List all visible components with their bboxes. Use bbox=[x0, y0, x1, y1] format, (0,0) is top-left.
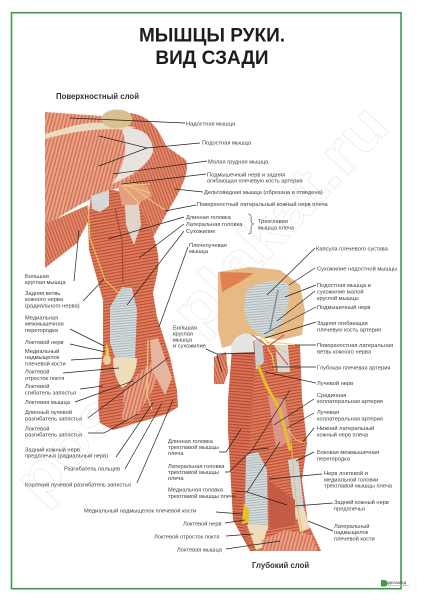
labels: superficial left: отросток локтя bbox=[25, 376, 64, 382]
supraspinatus bbox=[45, 112, 108, 136]
labels: superficial left: предплечья (радиальный нерв) bbox=[25, 452, 108, 460]
teres major bbox=[45, 205, 89, 268]
labels: superficial left bbox=[25, 274, 131, 488]
labels: deep right: предплечья bbox=[334, 506, 365, 512]
labels: superficial right: Плечелучевая bbox=[189, 243, 227, 249]
labels: deep left: круглая bbox=[173, 332, 193, 338]
triceps tendon bbox=[245, 452, 268, 534]
anconeus bbox=[122, 360, 159, 420]
infraspinatus bbox=[45, 129, 153, 226]
triceps brace bbox=[248, 214, 254, 234]
head separation bbox=[115, 208, 123, 283]
labels: deep left: мышца bbox=[173, 338, 193, 344]
labels: deep right: сухожилие малой bbox=[317, 288, 364, 296]
labels: superficial right: Подмышечный нерв и задняя bbox=[207, 172, 285, 178]
deep arm muscle body bbox=[243, 345, 321, 551]
labels: deep left: Локтевая мышца bbox=[177, 548, 223, 554]
labels: superficial right: Сухожилие bbox=[186, 229, 215, 235]
labels: superficial left: Задняя ветвь bbox=[25, 291, 60, 297]
lateral head tendon top bbox=[124, 192, 141, 245]
radial nerve branch bbox=[88, 205, 122, 296]
spine orange muscle bbox=[220, 272, 254, 292]
labels: superficial right: Поверхностный латеральный кожный нерв плеча bbox=[197, 201, 329, 208]
labels: superficial left: Разгибатель пальцев bbox=[64, 466, 120, 472]
anconeus bbox=[262, 530, 318, 551]
triceps and forearm bbox=[88, 190, 178, 430]
labels: deep left: и сухожилие bbox=[173, 344, 206, 350]
axillary vessels bbox=[118, 182, 152, 205]
tendon grey lateral bbox=[254, 338, 264, 370]
labels: superficial right: огибающая плечевую кость артерия bbox=[207, 178, 303, 184]
lateral epicondyle bbox=[296, 508, 310, 532]
illustration: deep arm bbox=[214, 267, 321, 551]
labels: superficial left: сгибатель запястья bbox=[25, 390, 76, 396]
acromion bbox=[102, 110, 132, 128]
radial nerve bbox=[258, 365, 290, 450]
leader lines bbox=[63, 118, 333, 549]
labels: superficial left: Большая bbox=[25, 274, 49, 280]
circumflex arteries bbox=[252, 335, 288, 370]
labels: deep right: круглой мышцы bbox=[317, 295, 359, 302]
labels: deep right: плечевую кость артерия bbox=[317, 328, 381, 334]
labels: superficial left: Короткий лучевой разгибатель запястья bbox=[25, 482, 131, 488]
labels: superficial right: мышца плеча bbox=[258, 226, 295, 232]
labels: deep right: Задняя огибающая bbox=[317, 321, 368, 327]
heading: superficial layer: Поверхностный слой bbox=[56, 92, 139, 101]
long head tendon top bbox=[91, 190, 109, 212]
labels: superficial right bbox=[186, 122, 329, 255]
watermark: poster-plakat.ru bbox=[1, 92, 401, 514]
labels: deep left: плеча bbox=[168, 451, 184, 457]
brachialis pale bbox=[268, 395, 292, 448]
labels: deep right: медиальной головки bbox=[324, 476, 378, 484]
labels: deep right: Подостная мышца и bbox=[317, 283, 371, 289]
labels: superficial right: мышца bbox=[189, 249, 209, 255]
labels: deep left: Длинная головка bbox=[168, 439, 214, 445]
axillary nerves bbox=[255, 330, 300, 370]
labels: superficial left: Локтевой bbox=[25, 426, 49, 432]
labels: deep right: Поверхностная латеральная bbox=[317, 343, 393, 349]
triceps tendon bbox=[110, 287, 137, 363]
labels: superficial left: межмышечная bbox=[25, 322, 64, 328]
ulnar nerve deep bbox=[242, 503, 249, 524]
labels: deep right: перегородка bbox=[317, 456, 351, 462]
title: ВИД СЗАДИ bbox=[155, 48, 269, 69]
labels: superficial left: разгибатель запястья bbox=[25, 432, 82, 438]
lateral septum bbox=[288, 458, 304, 520]
labels: deep right: надмыщелок bbox=[334, 530, 369, 536]
labels: superficial right: Малая грудная мышца bbox=[208, 160, 269, 166]
labels: deep left: Медиальная головка bbox=[168, 488, 224, 494]
labels: deep right: Сухожилие надостной мышцы bbox=[317, 266, 397, 272]
labels: deep left: Локтевой нерв bbox=[183, 520, 222, 528]
labels: deep left bbox=[84, 326, 237, 554]
triceps long head bbox=[228, 335, 262, 551]
scapular spine bbox=[45, 123, 135, 140]
labels: deep right: Лучевая bbox=[317, 410, 339, 416]
logo: ДЕЛАМЕД bbox=[388, 581, 406, 585]
olecranon bbox=[247, 525, 268, 550]
labels: superficial left: (радиального нерва) bbox=[25, 304, 80, 310]
labels: superficial right: Трехглавая bbox=[258, 219, 288, 225]
labels: superficial left: Локтевой нерв bbox=[25, 339, 64, 346]
labels: superficial left: плечевой кости bbox=[25, 360, 66, 368]
labels: superficial left: разгибатель запястья bbox=[25, 416, 82, 422]
labels: deep right: Капсула плечевого сустава bbox=[316, 246, 389, 252]
ulnar nerve bbox=[105, 342, 109, 362]
labels: superficial left: Локтевой bbox=[25, 383, 49, 390]
labels: deep right: ветвь кожного нерва bbox=[317, 350, 372, 356]
labels: superficial left: круглая мышца bbox=[25, 280, 66, 286]
labels: superficial right: Надостная мышца bbox=[186, 122, 236, 128]
labels: deep left: плеча bbox=[168, 476, 184, 482]
labels: deep right: коллатеральная артерия bbox=[317, 416, 383, 422]
labels: deep right: Нижний латеральный bbox=[317, 425, 374, 432]
scapula bbox=[218, 267, 305, 348]
labels: superficial right: Длинная головка bbox=[186, 215, 232, 221]
labels: deep right: Боковая межмышечная bbox=[317, 450, 379, 456]
labels: deep left: трехглавой мышцы bbox=[168, 444, 219, 451]
labels: deep right: Срединная bbox=[317, 393, 346, 399]
labels: deep right: кожный нерв плеча bbox=[317, 432, 369, 438]
labels: deep right: коллатеральная артерия bbox=[317, 399, 383, 405]
labels: deep right: Латеральный bbox=[334, 523, 370, 530]
labels: deep right: Нерв локтевой и bbox=[324, 470, 368, 477]
title bbox=[139, 26, 285, 69]
heading: deep layer: Глубокий слой bbox=[252, 561, 309, 570]
labels: deep left: Медиальный надмыщелок плечевой кости bbox=[84, 508, 196, 514]
forearm nerve bbox=[147, 340, 152, 410]
labels: deep left: Латеральная головка bbox=[168, 464, 225, 470]
deltoid flap bbox=[118, 113, 187, 256]
labels: superficial left: Локтевой bbox=[25, 368, 49, 376]
labels: superficial left: Длинный лучевой bbox=[25, 409, 72, 416]
labels: deep right: Задний кожный нерв bbox=[334, 499, 389, 506]
tendon long head top bbox=[231, 333, 254, 353]
labels: superficial left: Медиальный bbox=[25, 348, 59, 355]
labels: superficial left: надмыщелок bbox=[25, 355, 60, 361]
labels: deep left: Большая bbox=[173, 326, 197, 332]
labels: superficial right: Дельтовидная мышца (обрезана и отведена) bbox=[204, 190, 323, 196]
labels: superficial left: перегородка bbox=[25, 328, 59, 334]
labels: superficial right: Подостная мышца bbox=[202, 140, 252, 146]
title: МЫШЦЫ РУКИ. bbox=[139, 26, 285, 46]
olecranon bbox=[113, 358, 137, 388]
labels: superficial left: кожного нерва bbox=[25, 297, 64, 303]
labels: deep left: Локтевой отросток локтя bbox=[154, 534, 219, 540]
labels: deep left: трехглавой мышцы bbox=[168, 469, 219, 476]
medial muscle bbox=[268, 480, 295, 530]
labels: superficial left: Задний кожный нерв bbox=[25, 446, 80, 454]
forearm extensor tendons bbox=[150, 338, 172, 395]
illustration: superficial arm bbox=[45, 110, 187, 430]
labels: deep right bbox=[316, 246, 397, 542]
labels: deep right: Глубокая плечевая артерия bbox=[317, 366, 390, 372]
logo bbox=[381, 580, 409, 586]
labels: superficial right: Латеральная головка bbox=[186, 222, 243, 228]
labels: superficial left: Локтевая мышца bbox=[25, 400, 71, 406]
labels: deep left: трехглавой мышцы плеча bbox=[168, 493, 237, 500]
joint capsule bbox=[244, 281, 289, 336]
capsule fold bbox=[270, 290, 278, 330]
labels: superficial left: Медиальная bbox=[25, 316, 58, 322]
labels: deep right: плечевой кости bbox=[334, 536, 375, 542]
labels: deep right: Подмышечный нерв bbox=[317, 304, 370, 311]
labels: deep right: трехглавой мышцы плеча bbox=[324, 482, 393, 490]
infraspinatus tendon bbox=[112, 129, 153, 184]
cutaneous nerve bbox=[288, 430, 305, 535]
labels: deep right: Лучевой нерв bbox=[317, 380, 353, 387]
teres major small bbox=[214, 352, 228, 384]
medial epicondyle bbox=[103, 355, 111, 365]
